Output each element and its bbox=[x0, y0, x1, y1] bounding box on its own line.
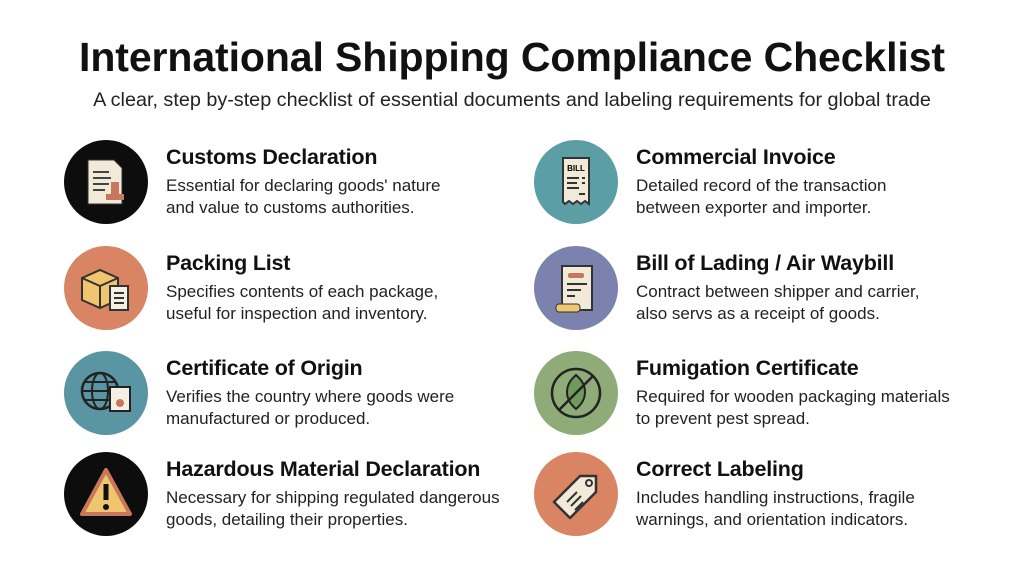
icon: document with stamp bbox=[64, 140, 148, 224]
icon: warning triangle bbox=[64, 452, 148, 536]
item: packing list: Packing List bbox=[166, 251, 290, 275]
item: fumigation certificate bbox=[534, 351, 950, 435]
item: bill of lading: Bill of Lading / Air Waybill bbox=[636, 251, 894, 275]
item: fumigation certificate: Fumigation Certificate bbox=[636, 356, 859, 380]
item: hazardous material: goods, detailing their properties. bbox=[166, 510, 408, 529]
item: certificate of origin: Verifies the country where goods were bbox=[166, 387, 454, 406]
item: commercial invoice: Commercial Invoice bbox=[636, 145, 836, 169]
icon: globe with certificate bbox=[64, 351, 148, 435]
item: packing list bbox=[64, 246, 438, 330]
item: customs declaration: and value to customs authorities. bbox=[166, 198, 415, 217]
item: commercial invoice bbox=[534, 140, 886, 224]
icon: bill receipt: BILL bbox=[567, 164, 585, 173]
icon: crossed leaf bbox=[534, 351, 618, 435]
icon: box with clipboard bbox=[64, 246, 148, 330]
item: fumigation certificate: to prevent pest spread. bbox=[636, 409, 810, 428]
item: hazardous material: Necessary for shipping regulated dangerous bbox=[166, 488, 500, 507]
item: hazardous material: Hazardous Material Declaration bbox=[166, 457, 480, 481]
item: customs declaration bbox=[64, 140, 440, 224]
item: certificate of origin bbox=[64, 351, 454, 435]
item: commercial invoice: between exporter and importer. bbox=[636, 198, 871, 217]
item: bill of lading bbox=[534, 246, 920, 330]
item: hazardous material bbox=[64, 452, 500, 536]
item: correct labeling: Correct Labeling bbox=[636, 457, 804, 481]
item: commercial invoice: Detailed record of the transaction bbox=[636, 176, 886, 195]
icon: tag bbox=[534, 452, 618, 536]
subtitle: A clear, step by-step checklist of essential documents and labeling requirements for global trade bbox=[93, 89, 931, 111]
item: customs declaration: Customs Declaration bbox=[166, 145, 377, 169]
title: International Shipping Compliance Checklist bbox=[79, 34, 945, 80]
item: fumigation certificate: Required for wooden packaging materials bbox=[636, 387, 950, 406]
item: correct labeling: warnings, and orientation indicators. bbox=[636, 510, 908, 529]
item: certificate of origin: Certificate of Origin bbox=[166, 356, 362, 380]
item: packing list: Specifies contents of each package, bbox=[166, 282, 438, 301]
item: correct labeling bbox=[534, 452, 915, 536]
item: customs declaration: Essential for declaring goods' nature bbox=[166, 176, 440, 195]
item: certificate of origin: manufactured or produced. bbox=[166, 409, 370, 428]
item: correct labeling: Includes handling instructions, fragile bbox=[636, 488, 915, 507]
icon: scroll bbox=[534, 246, 618, 330]
item: bill of lading: also servs as a receipt of goods. bbox=[636, 304, 880, 323]
icon: bill receipt bbox=[534, 140, 618, 224]
item: packing list: useful for inspection and inventory. bbox=[166, 304, 427, 323]
item: bill of lading: Contract between shipper and carrier, bbox=[636, 282, 920, 301]
